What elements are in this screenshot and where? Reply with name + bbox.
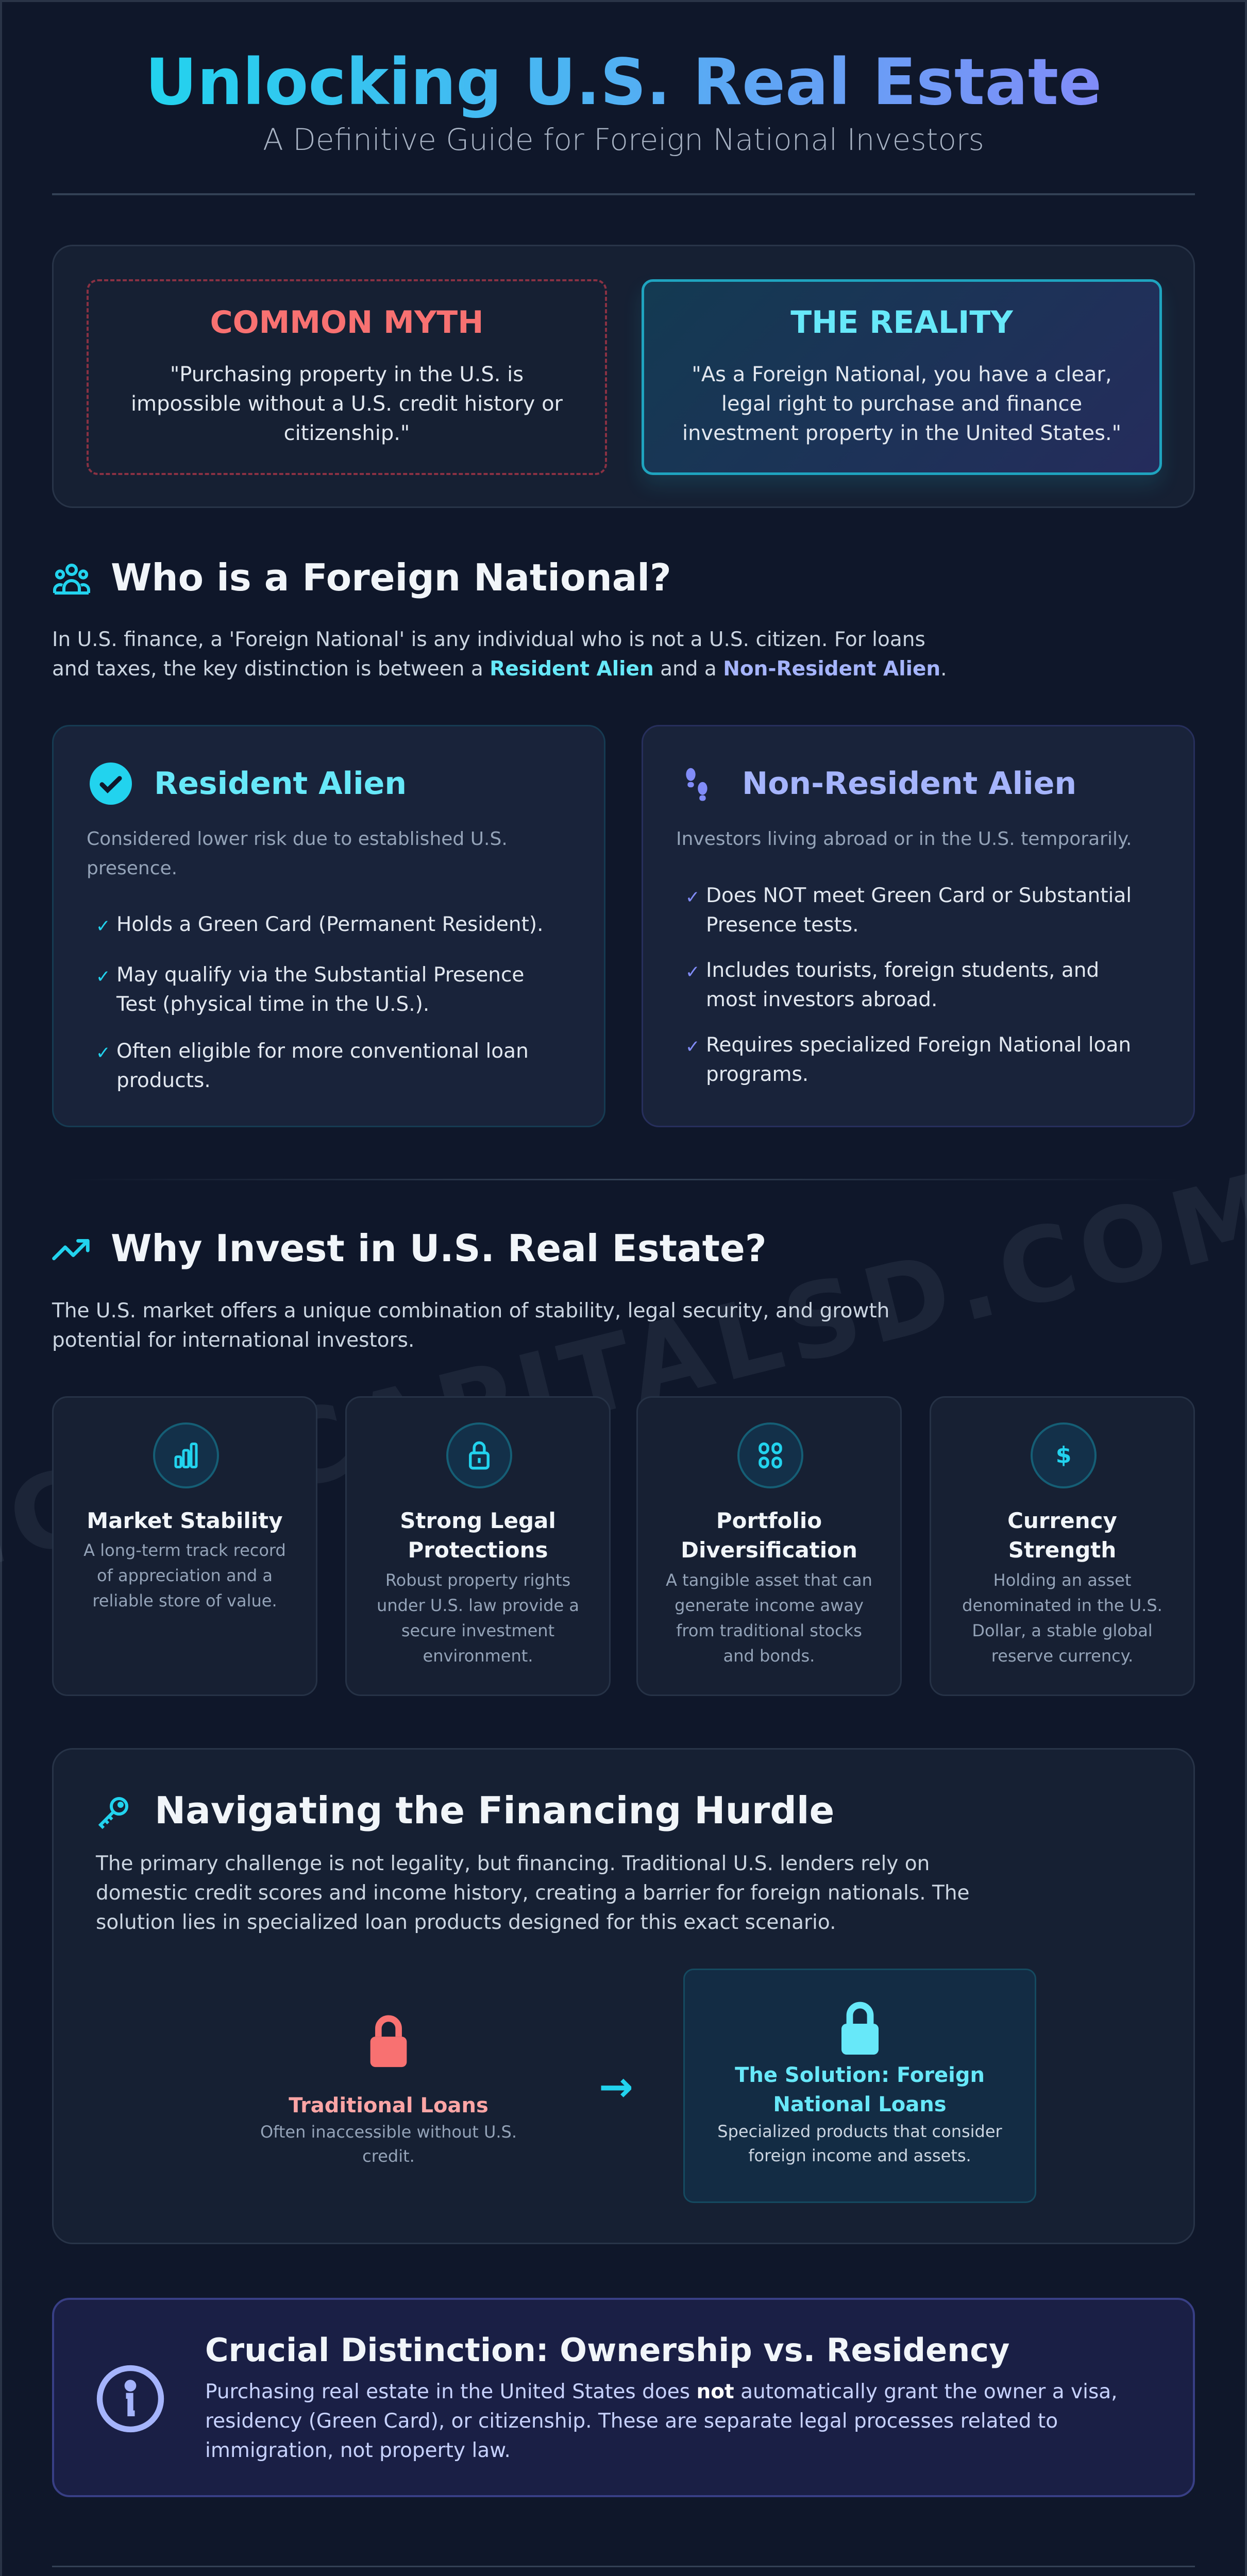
why paragraph: The U.S. market offers a unique combination of stability, legal security, and growth <box>52 1299 889 1323</box>
reality card <box>642 279 1162 475</box>
reality quote: legal right to purchase and finance <box>721 392 1082 416</box>
panel: financing hurdle <box>52 1748 1195 2244</box>
feature card: legal protections: Robust property rights <box>385 1570 570 1590</box>
feature card: currency: Dollar, a stable global <box>972 1621 1153 1640</box>
myth heading: COMMON MYTH <box>210 304 483 341</box>
arrow: → <box>599 2063 633 2111</box>
solution box <box>683 1969 1036 2203</box>
feature card: market stability <box>52 1396 317 1696</box>
traditional loans: Often inaccessible without U.S. <box>260 2122 517 2142</box>
solution box: National Loans <box>773 2093 947 2116</box>
feature card: diversification: generate income away <box>675 1596 864 1615</box>
feature card: diversification: Diversification <box>681 1537 857 1563</box>
feature card: currency: Strength <box>1008 1537 1116 1563</box>
feature card: currency <box>930 1396 1195 1696</box>
card: non-resident alien <box>642 725 1195 1127</box>
panel: crucial distinction <box>52 2298 1195 2497</box>
heading: Navigating the Financing Hurdle <box>155 1789 834 1832</box>
icon: dollar: $ <box>1056 1442 1071 1468</box>
traditional loans <box>260 2015 517 2166</box>
heading: Crucial Distinction: Ownership vs. Residency <box>205 2331 1009 2369</box>
solution box: The Solution: Foreign <box>735 2063 985 2087</box>
traditional loans: Traditional Loans <box>289 2094 488 2117</box>
description: presence. <box>87 858 177 879</box>
paragraph: residency (Green Card), or citizenship. These are separate legal processes related to <box>205 2410 1058 2433</box>
icon: open lock <box>841 2002 879 2055</box>
card: resident alien: ✓ <box>96 916 110 937</box>
feature card: diversification: Portfolio <box>716 1508 822 1533</box>
card: resident alien: May qualify via the Substantial Presence <box>116 963 524 987</box>
card: non-resident alien: most investors abroad. <box>706 988 937 1011</box>
paragraph: Purchasing real estate in the United States does not automatically grant the owner a visa, <box>205 2380 1118 2403</box>
heading: who is a foreign national: Who is a Foreign National? <box>111 556 671 599</box>
feature card: diversification: from traditional stocks <box>676 1621 862 1640</box>
feature card: market stability: Market Stability <box>87 1508 283 1533</box>
feature card: currency: denominated in the U.S. <box>962 1596 1162 1615</box>
title: Unlocking U.S. Real Estate <box>145 45 1102 120</box>
intro paragraph: In U.S. finance, a 'Foreign National' is any individual who is not a U.S. citizen. For loans <box>52 628 925 651</box>
myth quote: "Purchasing property in the U.S. is <box>170 363 524 386</box>
solution box: foreign income and assets. <box>748 2146 971 2165</box>
icon: closed lock <box>370 2015 407 2067</box>
intro paragraph: and taxes, the key distinction is between a Resident Alien and a Non-Resident Alien. <box>52 657 947 681</box>
feature card: legal protections: Protections <box>408 1537 548 1563</box>
why paragraph <box>52 1299 889 1352</box>
card: resident alien: Test (physical time in the U.S.). <box>116 993 429 1016</box>
feature card: diversification: A tangible asset that can <box>666 1570 872 1590</box>
paragraph: The primary challenge is not legality, but financing. Traditional U.S. lenders rely on <box>96 1852 930 1875</box>
traditional loans: credit. <box>362 2146 415 2166</box>
feature card: diversification <box>636 1396 902 1696</box>
heading: Non-Resident Alien <box>742 766 1076 802</box>
why paragraph: potential for international investors. <box>52 1329 414 1352</box>
card: non-resident alien: ✓ <box>685 962 700 982</box>
card: resident alien <box>52 725 605 1127</box>
feature card: legal protections: secure investment <box>401 1621 554 1640</box>
paragraph <box>205 2380 1118 2462</box>
icon: grid <box>737 1422 803 1488</box>
feature card: currency: Currency <box>1007 1508 1117 1533</box>
feature card: market stability: A long-term track record <box>83 1540 286 1560</box>
reality quote: investment property in the United States." <box>682 421 1121 445</box>
paragraph: domestic credit scores and income history, creating a barrier for foreign nationals. The <box>96 1882 970 1905</box>
reality heading: THE REALITY <box>790 304 1013 341</box>
myth quote: impossible without a U.S. credit history or <box>131 392 563 416</box>
feature card: legal protections: Strong Legal <box>400 1508 556 1533</box>
description: Considered lower risk due to established U.S. <box>87 828 508 850</box>
panel: myth vs reality <box>52 245 1195 508</box>
feature card: legal protections: under U.S. law provide a <box>377 1596 579 1615</box>
feature card: currency: Holding an asset <box>993 1570 1131 1590</box>
feature card: currency: reserve currency. <box>991 1646 1133 1666</box>
bullets: Holds a Green Card (Permanent Resident). <box>116 913 543 936</box>
card: non-resident alien: programs. <box>706 1063 808 1086</box>
description <box>87 828 508 879</box>
card: resident alien: ✓ <box>96 967 110 987</box>
reality quote <box>682 363 1121 445</box>
icon: lock <box>446 1422 512 1488</box>
feature card: market stability: of appreciation and a <box>97 1566 273 1585</box>
paragraph: solution lies in specialized loan products designed for this exact scenario. <box>96 1911 836 1934</box>
card: non-resident alien: ✓ <box>685 887 700 908</box>
feature card: legal protections: environment. <box>423 1646 533 1666</box>
heading: Resident Alien <box>154 766 407 802</box>
card: resident alien: products. <box>116 1069 211 1092</box>
card: resident alien: ✓ <box>96 1043 110 1063</box>
description: Investors living abroad or in the U.S. temporarily. <box>676 828 1132 850</box>
heading: why invest: Why Invest in U.S. Real Estate? <box>111 1227 767 1270</box>
icon: key <box>98 1797 128 1829</box>
icon: trending up <box>52 1239 90 1260</box>
paragraph: immigration, not property law. <box>205 2439 511 2462</box>
bullets <box>685 884 1132 937</box>
myth card <box>87 279 607 475</box>
reality quote: "As a Foreign National, you have a clear, <box>692 363 1112 386</box>
icon: bar chart <box>153 1422 219 1488</box>
feature card: diversification: and bonds. <box>723 1646 815 1666</box>
myth quote <box>131 363 563 445</box>
feature card: market stability: reliable store of value. <box>92 1591 277 1611</box>
card: non-resident alien: ✓ <box>685 1037 700 1057</box>
solution box: Specialized products that consider <box>717 2122 1002 2141</box>
card: non-resident alien: Requires specialized Foreign National loan <box>706 1033 1131 1057</box>
card: resident alien: Often eligible for more conventional loan <box>116 1040 529 1063</box>
subtitle: A Definitive Guide for Foreign National Investors <box>263 122 984 157</box>
paragraph <box>96 1852 970 1934</box>
myth quote: citizenship." <box>284 421 410 445</box>
icon: people <box>53 564 90 595</box>
intro paragraph <box>52 628 947 681</box>
card: non-resident alien: Includes tourists, foreign students, and <box>706 959 1099 982</box>
icon: footprints <box>686 768 707 801</box>
icon: dollar <box>1031 1422 1097 1488</box>
bullets: Does NOT meet Green Card or Substantial <box>706 884 1132 907</box>
feature card: legal protections <box>345 1396 611 1696</box>
bullets: Presence tests. <box>706 913 858 937</box>
icon: info <box>97 2365 164 2433</box>
icon: check circle <box>90 762 132 805</box>
